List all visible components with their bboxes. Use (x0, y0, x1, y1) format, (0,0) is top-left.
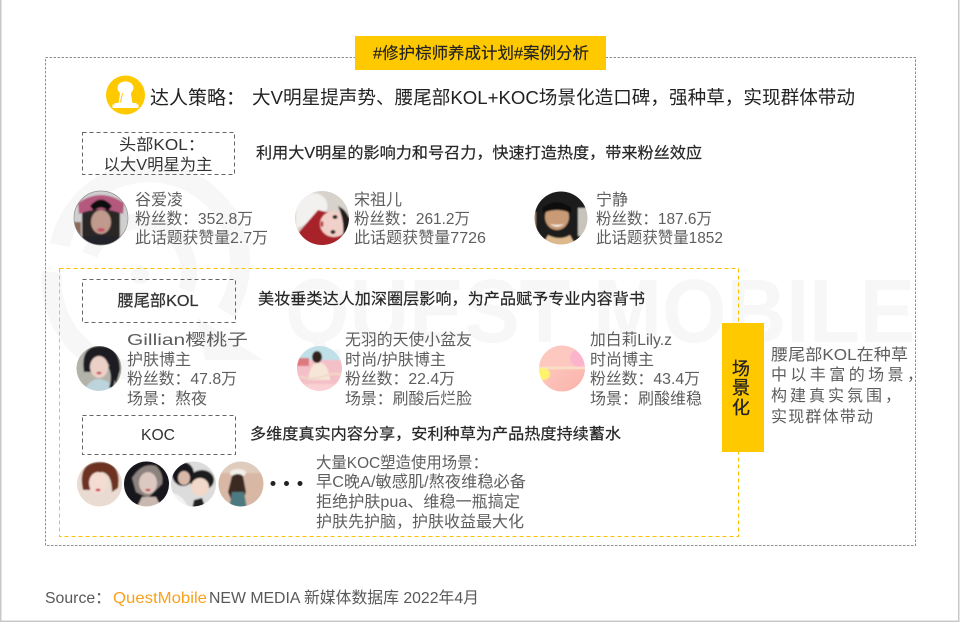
influencer: 谷爱凌: 此话题获赞量2.7万 (135, 229, 268, 247)
callout tag: 场景化 (722, 323, 764, 452)
label box: top KOL: 以大V明星为主 (104, 156, 212, 174)
influencer: 无羽的天使小盆友: 粉丝数：22.4万 (345, 370, 455, 388)
influencer: 宋祖儿: 此话题获赞量7726 (354, 229, 486, 247)
icon: stamp (106, 76, 145, 114)
description: mid-tail KOL: 美妆垂类达人加深圈层影响，为产品赋予专业内容背书 (258, 290, 645, 308)
watermark: QuestMobile logo and wordmark (52, 172, 915, 371)
influencer: 宋祖儿: 粉丝数：261.2万 (354, 210, 470, 228)
watermark: QuestMobile logo and wordmark: QUEST MOBILE (285, 262, 915, 362)
influencer: 加白莉Lily.z: 场景：刷酸维稳 (590, 390, 702, 408)
influencer: 无羽的天使小盆友 (295, 331, 472, 408)
influencer: 宁静: 此话题获赞量1852 (596, 229, 723, 247)
source footer (45, 589, 479, 607)
description: KOC: 多维度真实内容分享，安利种草为产品热度持续蓄水 (250, 425, 622, 443)
yellow dashed panel: mid-tail KOL and KOC (60, 268, 738, 536)
influencer: 加白莉Lily.z: 时尚博主 (590, 351, 654, 369)
influencer: 宁静: 宁静 (596, 191, 628, 209)
KOC avatars (77, 462, 264, 506)
text: scene summary: 构建真实氛围， (771, 387, 901, 405)
avatar: KOC 4 (218, 462, 264, 506)
text: scene summary: 腰尾部KOL在种草 (771, 346, 908, 364)
source footer: NEW MEDIA 新媒体数据库 2022年4月 (209, 589, 479, 607)
label box: top KOL (82, 132, 234, 174)
main dashed panel (46, 58, 916, 546)
avatar: Gillian (76, 346, 122, 391)
title tag: #修护棕师养成计划#案例分析 (373, 44, 589, 62)
influencer: 宁静 (534, 191, 722, 245)
callout tag: 场景化: 景 (732, 378, 750, 398)
influencer: 加白莉Lily.z: 粉丝数：43.4万 (590, 370, 700, 388)
text: KOC scenarios (316, 454, 526, 531)
avatar: 谷爱凌 (74, 190, 128, 246)
source footer: Source： (45, 590, 111, 607)
label box: top KOL: 头部KOL： (119, 136, 205, 154)
influencer: Gillian樱桃子: 场景：熬夜 (127, 389, 207, 408)
influencer: 无羽的天使小盆友: 无羽的天使小盆友 (345, 331, 472, 349)
callout tag: 场景化: 化 (732, 398, 750, 418)
influencer: Gillian樱桃子 (74, 331, 248, 408)
description: top KOL: 利用大V明星的影响力和号召力，快速打造热度，带来粉丝效应 (256, 143, 702, 162)
avatar: KOC 3 (171, 462, 216, 506)
avatar: 宁静 (534, 192, 588, 244)
avatar: KOC 1 (77, 462, 122, 506)
title tag (355, 36, 606, 70)
callout tag: 场景化: 场 (732, 359, 750, 379)
avatar: 宋祖儿 (295, 191, 349, 245)
influencer: 宋祖儿 (295, 191, 486, 245)
text: scene summary: 实现群体带动 (771, 408, 873, 426)
source footer: QuestMobile (113, 590, 207, 607)
text: scene summary: 中以丰富的场景， (771, 366, 923, 384)
label box: KOC: KOC (141, 427, 175, 444)
influencer: 谷爱凌 (74, 190, 267, 246)
ellipsis dots (270, 481, 302, 486)
text: KOC scenarios: 护肤先护脑，护肤收益最大化 (316, 513, 524, 531)
influencer: Gillian樱桃子: 护肤博主 (127, 351, 191, 369)
influencer: Gillian樱桃子: Gillian樱桃子 (127, 331, 248, 349)
avatar: 无羽的天使小盆友 (297, 346, 342, 391)
strategy heading: 大V明星提声势、腰尾部KOL+KOC场景化造口碑，强种草，实现群体带动 (252, 87, 855, 108)
influencer: 宋祖儿: 宋祖儿 (354, 191, 402, 209)
influencer: 宁静: 粉丝数：187.6万 (596, 210, 712, 228)
avatar: 加白莉Lily.z (539, 346, 585, 392)
influencer: 谷爱凌: 粉丝数：352.8万 (135, 210, 253, 228)
text: KOC scenarios: 拒绝护肤pua、维稳一瓶搞定 (316, 493, 520, 511)
label box: mid-tail KOL: 腰尾部KOL (118, 292, 199, 310)
influencer: 加白莉Lily.z: 加白莉Lily.z (590, 331, 672, 349)
label box: KOC (82, 416, 236, 454)
label box: mid-tail KOL (82, 280, 236, 322)
avatar: KOC 2 (124, 462, 169, 506)
influencer: 谷爱凌: 谷爱凌 (135, 191, 183, 209)
text: KOC scenarios: 大量KOC塑造使用场景： (316, 454, 488, 472)
strategy heading: 达人策略： (150, 87, 245, 109)
influencer: 无羽的天使小盆友: 场景：刷酸后烂脸 (345, 390, 472, 408)
influencer: 加白莉Lily.z (536, 331, 702, 408)
influencer: 无羽的天使小盆友: 时尚/护肤博主 (345, 351, 446, 369)
text: scene summary (771, 346, 923, 426)
text: KOC scenarios: 早C晚A/敏感肌/熬夜维稳必备 (316, 472, 526, 491)
influencer: Gillian樱桃子: 粉丝数：47.8万 (127, 370, 237, 388)
